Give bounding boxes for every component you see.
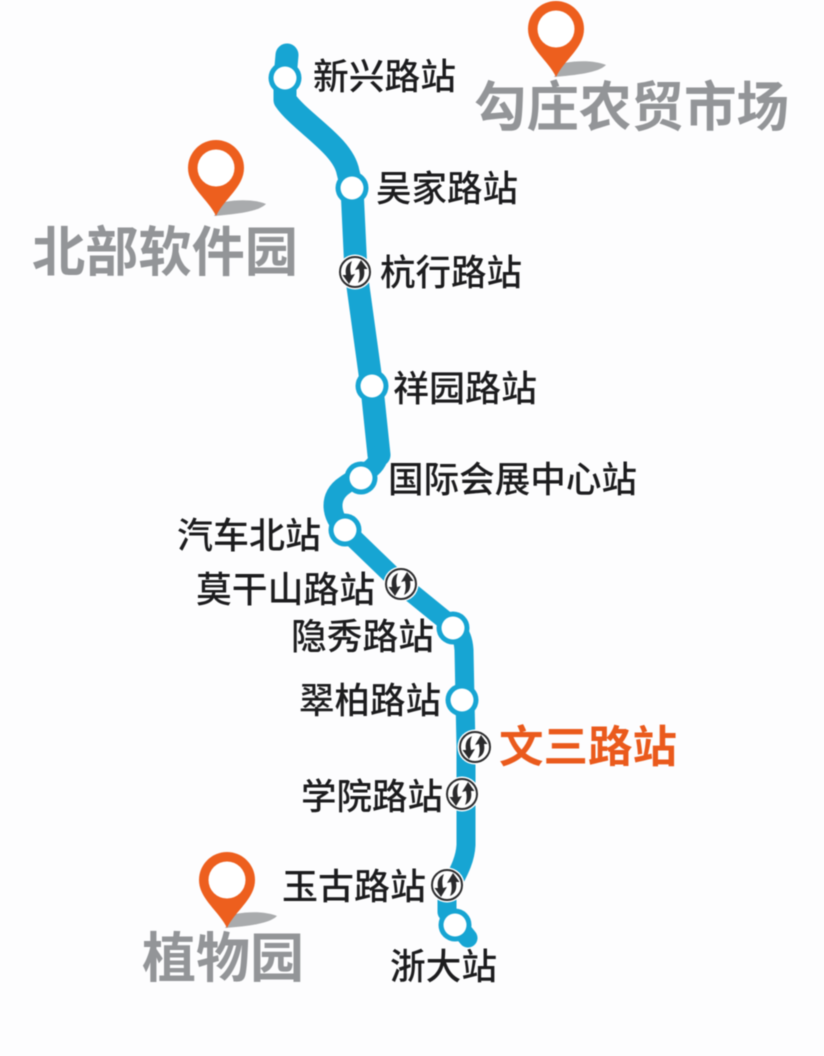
label: 浙大站: 浙大站 bbox=[390, 946, 497, 987]
station marker: 祥园路站 bbox=[356, 370, 388, 402]
label: 吴家路站: 吴家路站 bbox=[376, 168, 518, 209]
metro line bbox=[285, 55, 468, 938]
label: 杭行路站: 杭行路站 bbox=[380, 252, 522, 293]
label: 莫干山路站: 莫干山路站 bbox=[196, 569, 375, 610]
label: 学院路站: 学院路站 bbox=[301, 776, 443, 817]
icon: map pin 北部软件园 bbox=[188, 140, 266, 216]
station marker: 翠柏路站 bbox=[446, 684, 478, 716]
label: 文三路站 (highlighted): 文三路站 bbox=[499, 723, 677, 772]
interchange icon: 杭行路站 bbox=[338, 254, 372, 290]
interchange icon: 学院路站 bbox=[444, 776, 480, 812]
station marker: 国际会展中心站 bbox=[344, 462, 378, 494]
station marker: 吴家路站 bbox=[336, 172, 368, 204]
interchange icon: 文三路站 bbox=[458, 730, 492, 764]
label: 新兴路站: 新兴路站 bbox=[313, 56, 456, 97]
interchange icon: 玉古路站 bbox=[430, 868, 464, 902]
place name: 植物园: 植物园 bbox=[142, 929, 304, 989]
label: 祥园路站: 祥园路站 bbox=[393, 368, 537, 409]
station marker: 隐秀路站 bbox=[436, 612, 470, 644]
place name: 北部软件园: 北部软件园 bbox=[32, 223, 298, 283]
station marker: 汽车北站 bbox=[328, 514, 362, 546]
station marker: 新兴路站 bbox=[268, 62, 302, 94]
icon: map pin 勾庄农贸市场 bbox=[528, 1, 606, 77]
interchange icon: 莫干山路站 bbox=[384, 566, 418, 602]
label: 玉古路站: 玉古路站 bbox=[282, 866, 426, 907]
label: 汽车北站: 汽车北站 bbox=[177, 515, 321, 556]
label: 翠柏路站: 翠柏路站 bbox=[299, 680, 441, 721]
icon: map pin 植物园 bbox=[199, 852, 277, 928]
place name: 勾庄农贸市场: 勾庄农贸市场 bbox=[474, 78, 789, 138]
station marker: 浙大站 bbox=[438, 908, 472, 942]
label: 国际会展中心站: 国际会展中心站 bbox=[388, 459, 637, 500]
label: 隐秀路站: 隐秀路站 bbox=[291, 616, 434, 657]
